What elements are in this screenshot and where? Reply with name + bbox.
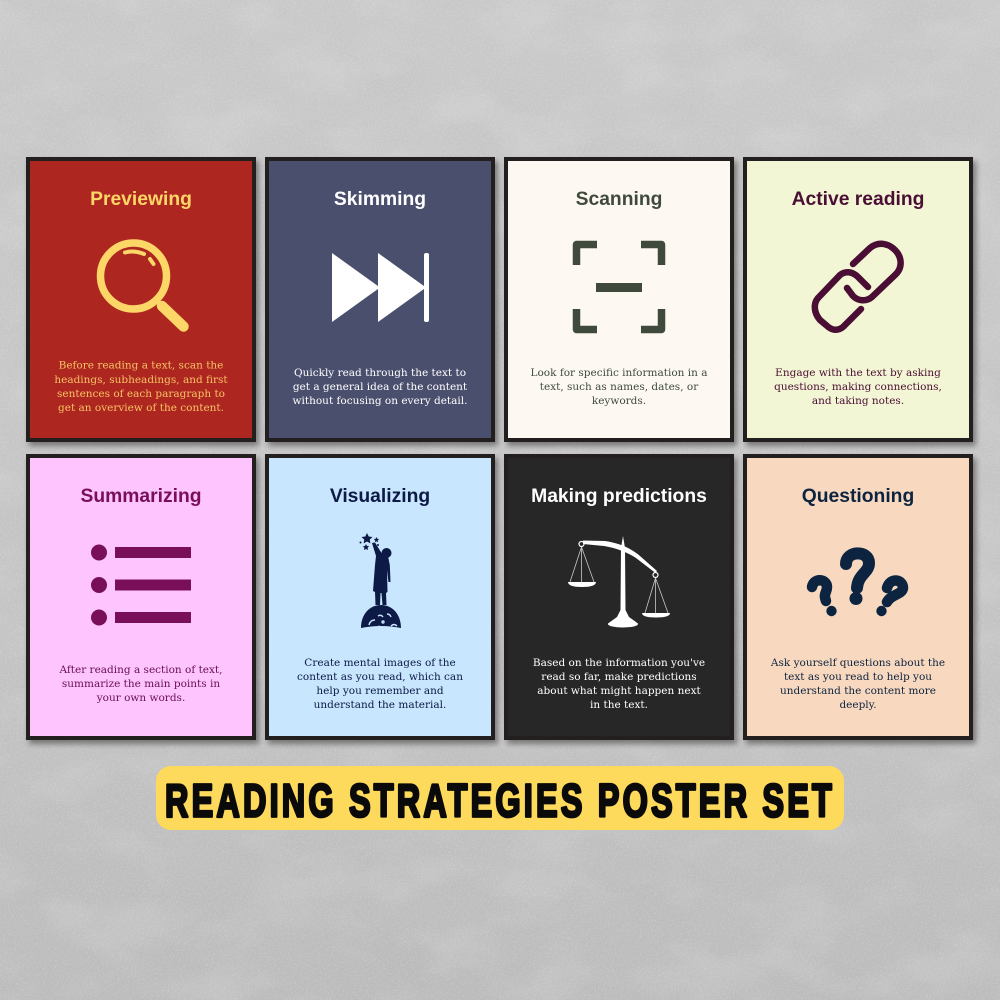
icon: chain link [815,244,901,330]
text: Active reading description: questions, making connections, [774,381,942,393]
text: Active reading description: Engage with the text by asking [775,367,941,379]
heading: Scanning: Scanning [576,189,662,210]
heading: Summarizing: Summarizing [80,486,202,507]
text: Making predictions description: read so far, make predictions [541,671,697,683]
text: Making predictions description: about what might happen next [537,685,701,697]
text: Previewing description: sentences of each paragraph to [57,388,225,400]
heading: Previewing: Previewing [90,189,192,210]
text: Scanning description: keywords. [592,395,646,407]
icon: fast forward [332,253,429,322]
text: Summarizing description [58,664,223,704]
text: Summarizing description: After reading a section of text, [58,664,223,676]
text: Questioning description: Ask yourself questions about the [770,657,945,669]
text: Previewing description: headings, subheadings, and first [54,374,228,386]
panel: Summarizing [26,454,259,744]
panel: Visualizing [265,454,498,744]
panel: Skimming [265,157,498,446]
text: Active reading description: and taking notes. [812,395,904,407]
panel: Scanning [504,157,737,446]
text: Making predictions description: in the text. [590,699,648,711]
panel: Active reading [743,157,976,446]
icon details: moon craters [369,614,397,628]
title banner [156,766,844,830]
text: Questioning description: text as you read to help you [784,671,932,683]
text: Active reading description [774,367,942,407]
text: Skimming description: Quickly read through the text to [294,367,466,379]
text: Previewing description: get an overview of the content. [58,402,224,414]
text: Summarizing description: your own words. [96,692,185,704]
panel: Previewing [26,157,259,446]
heading: Making predictions: Making predictions [531,486,707,507]
text: Scanning description [531,367,707,407]
text: Scanning description: text, such as names, dates, or [540,381,699,393]
text: Scanning description: Look for specific information in a [531,367,707,379]
panel: Questioning [743,454,976,744]
icon: child reaching for stars on the moon [360,533,401,628]
text: Previewing description [54,360,228,414]
text: Visualizing description: help you remember and [316,685,444,697]
text: Visualizing description: content as you read, which can [297,671,463,683]
text: Visualizing description: Create mental images of the [304,657,456,669]
icon: three question marks [812,553,903,616]
text: Visualizing description [297,657,463,711]
text: Previewing description: Before reading a text, scan the [59,360,223,372]
text: Questioning description: deeply. [839,699,877,711]
icon: bullet list [91,544,191,626]
icon: magnifying glass [100,243,184,326]
panel: Making predictions [504,454,737,744]
text: Making predictions description [533,657,705,711]
text: Making predictions description: Based on the information you've [533,657,705,669]
icon: scan frame [576,244,662,330]
heading: Skimming: Skimming [334,189,426,210]
heading: Active reading: Active reading [792,189,924,210]
text: Skimming description [293,367,468,407]
heading: Visualizing: Visualizing [330,486,430,507]
text: Skimming description: get a general idea of the content [293,381,468,393]
text: Questioning description [770,657,945,711]
text: Questioning description: understand the content more [780,685,936,697]
text: Visualizing description: understand the material. [314,699,446,711]
text: Summarizing description: summarize the main points in [62,678,220,690]
text: Skimming description: without focusing on every detail. [293,395,467,407]
heading: Questioning: Questioning [802,486,914,507]
icon: balance scale [568,536,670,628]
